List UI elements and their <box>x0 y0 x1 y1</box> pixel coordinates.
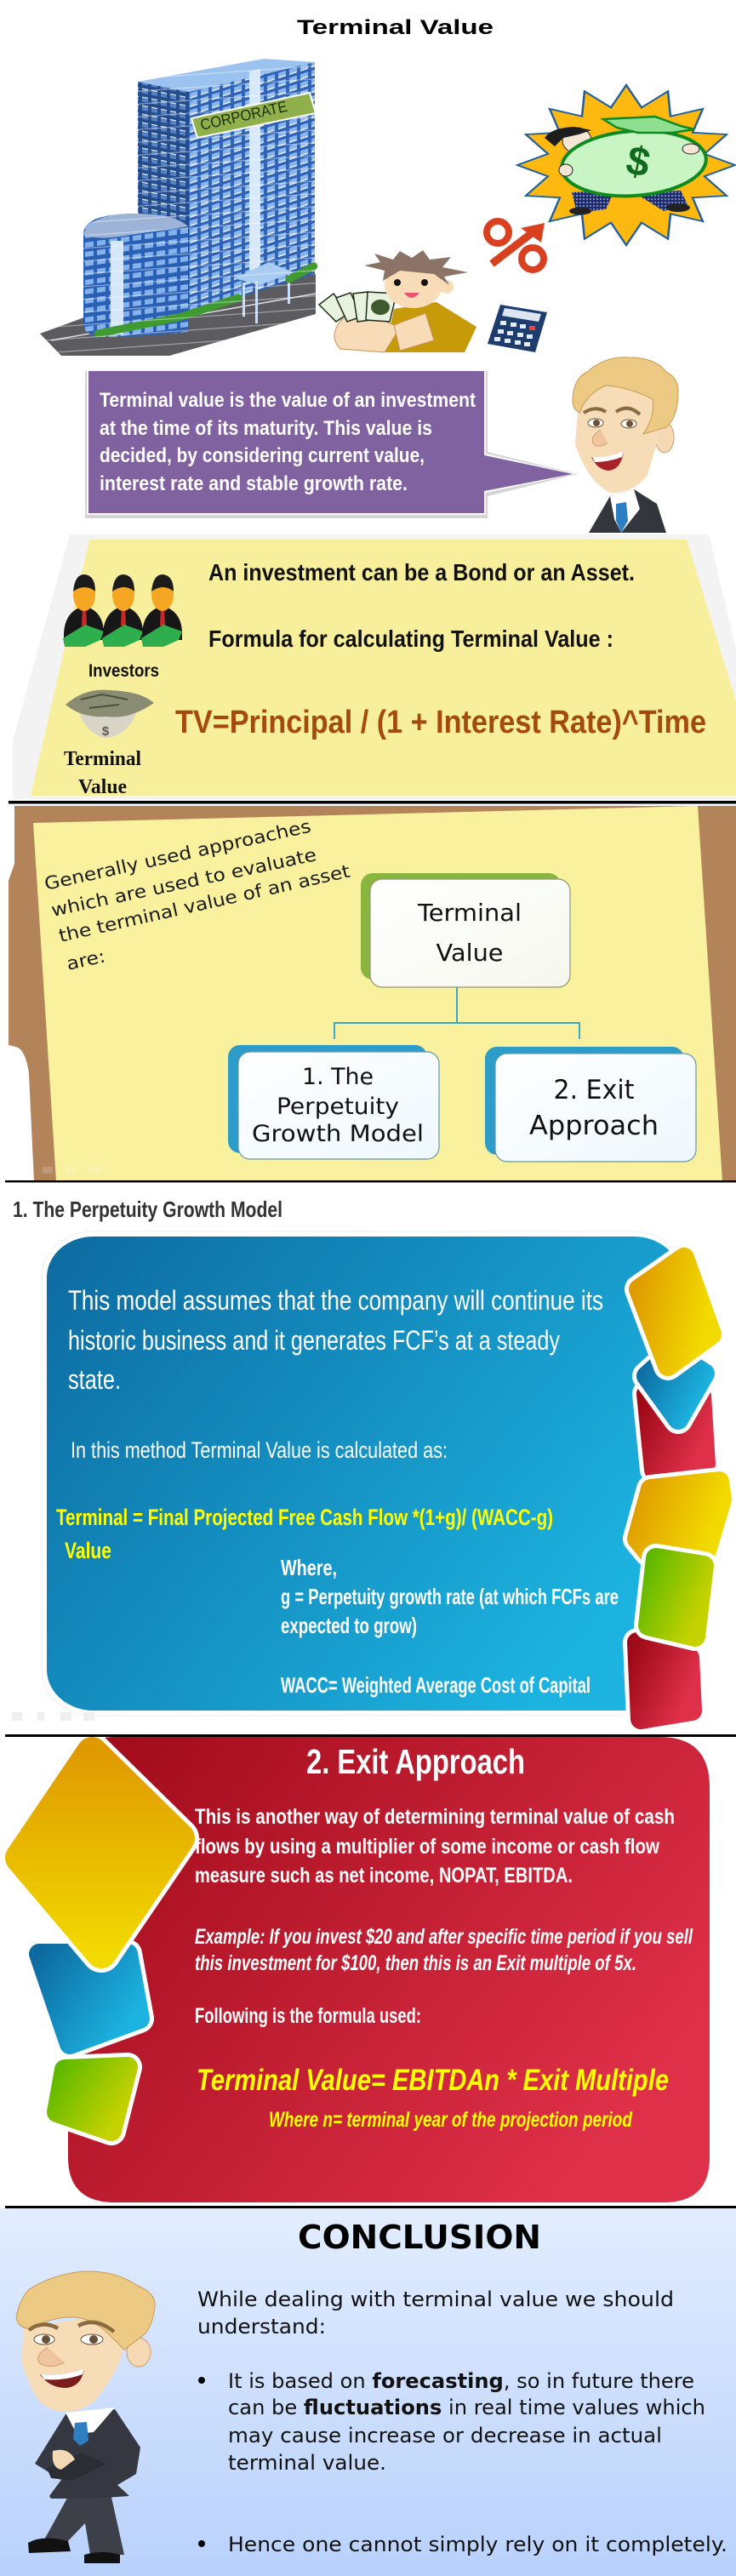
note: n definition: Where n= terminal year of the projection period <box>269 2108 633 2132</box>
label: investors: Investors <box>88 661 159 681</box>
text: variable definitions <box>281 1555 619 1698</box>
text: approaches intro: Generally used approaches <box>43 816 313 894</box>
label: terminal value: Terminal <box>64 748 141 770</box>
text: approaches intro: are: <box>65 945 107 974</box>
text: model description: historic business and it generates FCF’s at a steady <box>68 1325 560 1356</box>
text: formula intro: Following is the formula used: <box>195 2004 421 2028</box>
illustration: money bag on starburst: $ <box>622 138 654 186</box>
formula: perpetuity: Terminal = Final Projected Free Cash Flow *(1+g)/ (WACC-g) <box>56 1505 553 1530</box>
box: perpetuity growth model: Growth Model <box>252 1121 424 1147</box>
panel: conclusion <box>0 2208 736 2576</box>
panel: investment formula <box>13 534 736 799</box>
text: model description: This model assumes that the company will continue its <box>68 1285 603 1316</box>
text: exit description: measure such as net income, NOPAT, EBITDA. <box>195 1864 573 1888</box>
illustration: corporate building <box>36 59 349 356</box>
box: perpetuity growth model: 1. The <box>302 1064 374 1090</box>
text: conclusion intro: While dealing with terminal value we should <box>197 2288 674 2311</box>
text: variable definitions: WACC= Weighted Average Cost of Capital <box>281 1672 591 1698</box>
text: formula heading: Formula for calculating Terminal Value : <box>208 625 613 652</box>
bullet: do not rely: Hence one cannot simply rely on it completely. <box>228 2533 727 2556</box>
box: exit approach: Approach <box>529 1111 659 1141</box>
bullet: forecasting <box>198 2369 705 2475</box>
sign: corporate: CORPORATE <box>199 98 288 134</box>
bullet: forecasting: It is based on forecasting, so in future there <box>228 2369 694 2393</box>
text: approaches intro: the terminal value of an asset <box>57 861 352 946</box>
callout: terminal value definition: decided, by considering current value, <box>100 444 425 467</box>
connector lines <box>334 987 579 1039</box>
panel: perpetuity growth model <box>12 1231 685 1721</box>
icon: percent with arrow <box>487 221 545 270</box>
text: conclusion intro: understand: <box>197 2315 326 2339</box>
formula: perpetuity <box>56 1505 553 1563</box>
illustration: boy counting money <box>319 250 476 352</box>
text: approaches intro <box>43 816 352 974</box>
icon: slide nav controls <box>15 1167 101 1174</box>
heading: perpetuity growth model: 1. The Perpetuity Growth Model <box>13 1197 282 1222</box>
box: exit approach: 2. Exit <box>553 1075 635 1105</box>
title: Terminal Value <box>297 16 494 39</box>
text: conclusion intro <box>197 2288 674 2339</box>
bullet: forecasting: may cause increase or decrease in actual <box>228 2424 662 2447</box>
decoration: coloured tiles right <box>637 1258 722 1719</box>
callout: terminal value definition: interest rate and stable growth rate. <box>100 472 408 495</box>
text: approaches intro: which are used to evaluate <box>49 844 318 921</box>
bullet: forecasting: terminal value. <box>228 2451 386 2475</box>
text: model description: state. <box>68 1364 121 1395</box>
panel: exit approach <box>63 1732 715 2208</box>
text: variable definitions: expected to grow) <box>281 1613 417 1638</box>
box: terminal value: Value <box>436 939 504 967</box>
illustration: money bag on starburst <box>517 85 735 245</box>
sign: corporate <box>191 93 316 138</box>
text: investment definition: An investment can be a Bond or an Asset. <box>208 559 635 585</box>
decoration: coloured tiles left <box>20 1752 180 2131</box>
box: perpetuity growth model: Perpetuity <box>277 1094 399 1120</box>
box: perpetuity growth model <box>228 1045 439 1159</box>
box: exit approach <box>485 1047 696 1162</box>
text: method intro: In this method Terminal Value is calculated as: <box>71 1437 448 1463</box>
icon: money sack: $ <box>102 724 110 739</box>
illustration: businessman arms crossed <box>16 2271 155 2563</box>
icon: calculator <box>488 305 547 352</box>
label: terminal value: Value <box>78 776 127 798</box>
icon: money sack <box>66 690 154 739</box>
illustration: smiling businessman <box>573 357 678 533</box>
heading: exit approach: 2. Exit Approach <box>306 1742 525 1781</box>
label: terminal value <box>64 748 141 798</box>
icon: three investors <box>63 574 182 647</box>
box: terminal value: Terminal <box>417 899 522 927</box>
bullet: forecasting: can be fluctuations in real time values which <box>228 2396 705 2419</box>
box: terminal value <box>361 873 570 987</box>
text: exit example <box>195 1925 693 1975</box>
heading: conclusion: CONCLUSION <box>298 2219 541 2256</box>
callout: terminal value definition: Terminal value is the value of an investment <box>100 389 476 412</box>
text: exit description <box>195 1805 675 1888</box>
text: variable definitions: Where, <box>281 1555 337 1580</box>
panel: approaches folder <box>9 806 736 1181</box>
text: model description <box>68 1285 603 1395</box>
icon: slide nav controls <box>12 1712 94 1721</box>
callout: terminal value definition <box>85 369 578 518</box>
formula: perpetuity: Value <box>65 1538 111 1563</box>
callout: terminal value definition: at the time of its maturity. This value is <box>100 417 432 440</box>
